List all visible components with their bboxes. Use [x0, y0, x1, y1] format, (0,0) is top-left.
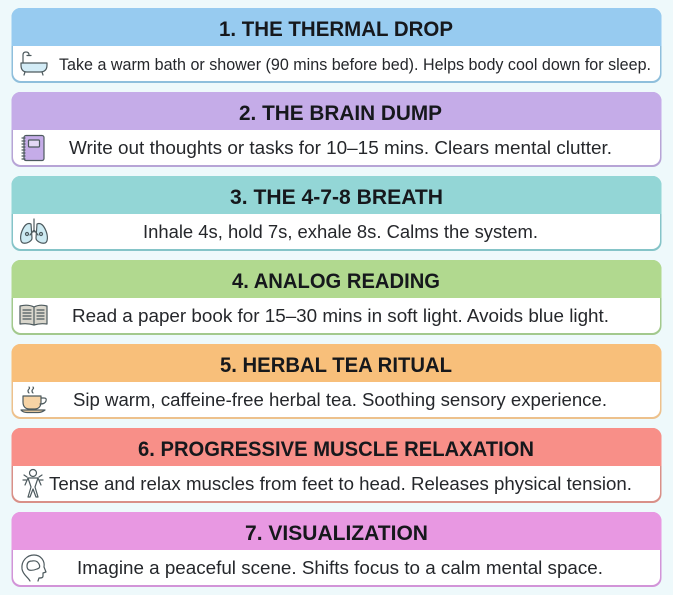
heading: visualization: 7. VISUALIZATION	[245, 522, 428, 545]
icon: bathtub	[21, 52, 47, 75]
panel: 4 analog reading	[12, 260, 662, 335]
text: thermal drop description: Take a warm bath or shower (90 mins before bed). Helps body cool down for sleep.	[59, 56, 651, 74]
icon: lungs	[21, 219, 47, 243]
heading: the 4-7-8 breath: 3. THE 4-7-8 BREATH	[230, 186, 443, 209]
text: tea description: Sip warm, caffeine-free herbal tea. Soothing sensory experience.	[73, 390, 607, 410]
heading: the brain dump: 2. THE BRAIN DUMP	[239, 102, 442, 125]
icon: notebook	[22, 136, 44, 160]
text: muscle relaxation description: Tense and relax muscles from feet to head. Releases physical tension.	[49, 474, 632, 494]
icon: tea cup	[21, 387, 46, 412]
heading: analog reading: 4. ANALOG READING	[232, 270, 440, 293]
icon: open book	[20, 305, 47, 325]
heading: herbal tea ritual: 5. HERBAL TEA RITUAL	[220, 354, 452, 377]
panel: 5 herbal tea ritual	[12, 344, 662, 419]
panel: 3 the 4-7-8 breath	[12, 176, 662, 251]
panel: 1 the thermal drop	[12, 8, 662, 83]
icon: tense person	[23, 470, 43, 497]
heading: the thermal drop: 1. THE THERMAL DROP	[219, 18, 453, 41]
panel: 2 the brain dump	[12, 92, 662, 167]
icon: head with thought	[22, 555, 46, 581]
text: breath description: Inhale 4s, hold 7s, exhale 8s. Calms the system.	[143, 222, 538, 242]
panel: 7 visualization	[12, 512, 662, 587]
text: reading description: Read a paper book for 15–30 mins in soft light. Avoids blue light.	[72, 306, 609, 326]
panel: 6 progressive muscle relaxation	[12, 428, 662, 503]
heading: progressive muscle relaxation: 6. PROGRESSIVE MUSCLE RELAXATION	[138, 438, 534, 461]
text: visualization description: Imagine a peaceful scene. Shifts focus to a calm mental space.	[77, 558, 603, 578]
text: brain dump description: Write out thoughts or tasks for 10–15 mins. Clears mental clutter.	[69, 138, 612, 158]
